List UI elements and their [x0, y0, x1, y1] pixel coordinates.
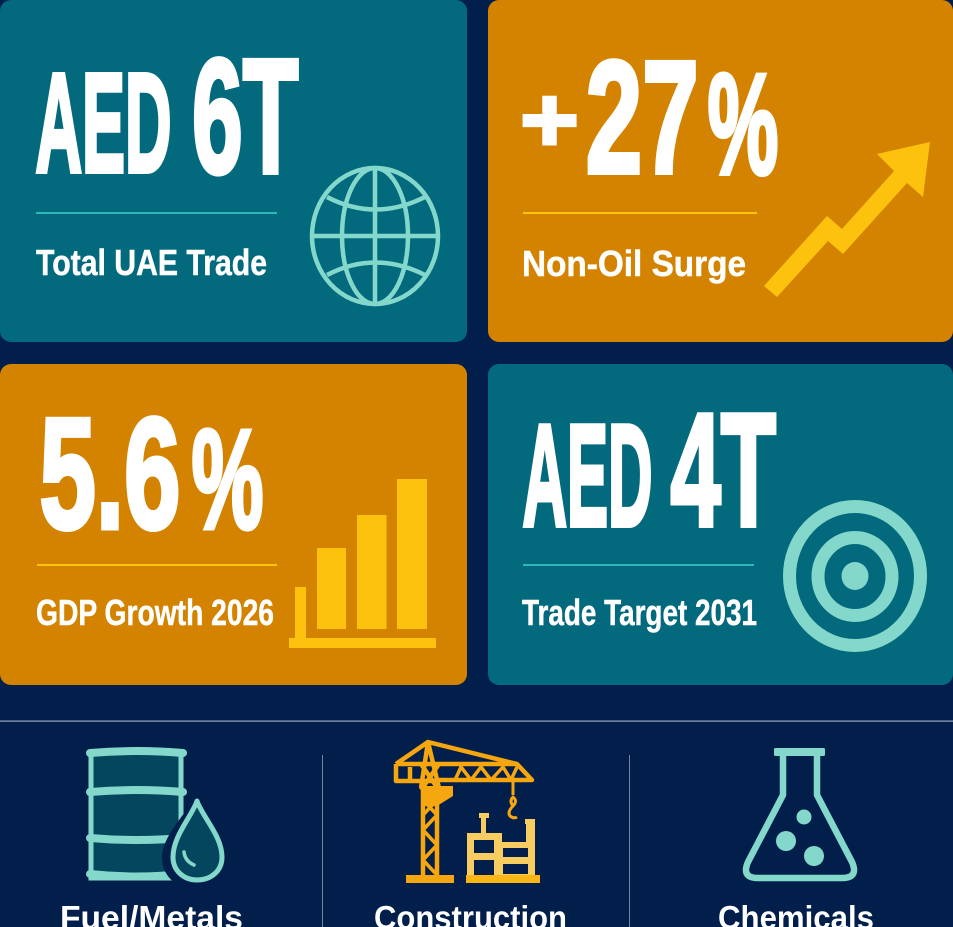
panel: total UAE trade: [0, 0, 467, 342]
icon: globe: [312, 168, 438, 304]
stat: +27%: +: [520, 69, 579, 171]
icon: oil barrel and drop: [90, 751, 233, 890]
icon: target: [790, 506, 920, 646]
stat: AED 4T: AED: [522, 394, 652, 556]
sector: fuel and metals: [60, 751, 243, 927]
stat: 5.6%: %: [192, 400, 263, 558]
label: GDP Growth 2026: GDP Growth 2026: [36, 592, 274, 633]
stat: +27%: [520, 28, 778, 206]
stat: AED 6T: AED: [36, 44, 172, 202]
stat: 5.6%: 5.6: [40, 386, 180, 562]
panel: GDP growth: [0, 364, 467, 685]
sector: construction: [374, 742, 567, 927]
sector: chemicals: [718, 748, 874, 927]
stat: +27%: 27: [586, 28, 699, 206]
stat: AED 4T: 4T: [670, 380, 776, 560]
label: Total UAE Trade: Total UAE Trade: [36, 242, 267, 283]
stat: AED 6T: 6T: [192, 24, 298, 208]
icon: rising arrow: [764, 142, 930, 297]
icon: flask: [746, 748, 854, 878]
panel: trade target: [488, 364, 953, 685]
label: Trade Target 2031: Trade Target 2031: [522, 592, 757, 633]
label: Non-Oil Surge: Non-Oil Surge: [522, 243, 746, 284]
panel: non-oil surge: [488, 0, 953, 342]
icon: tower crane and building: [396, 742, 540, 883]
icon: bar chart: [289, 479, 436, 648]
stat: +27%: %: [708, 46, 778, 204]
